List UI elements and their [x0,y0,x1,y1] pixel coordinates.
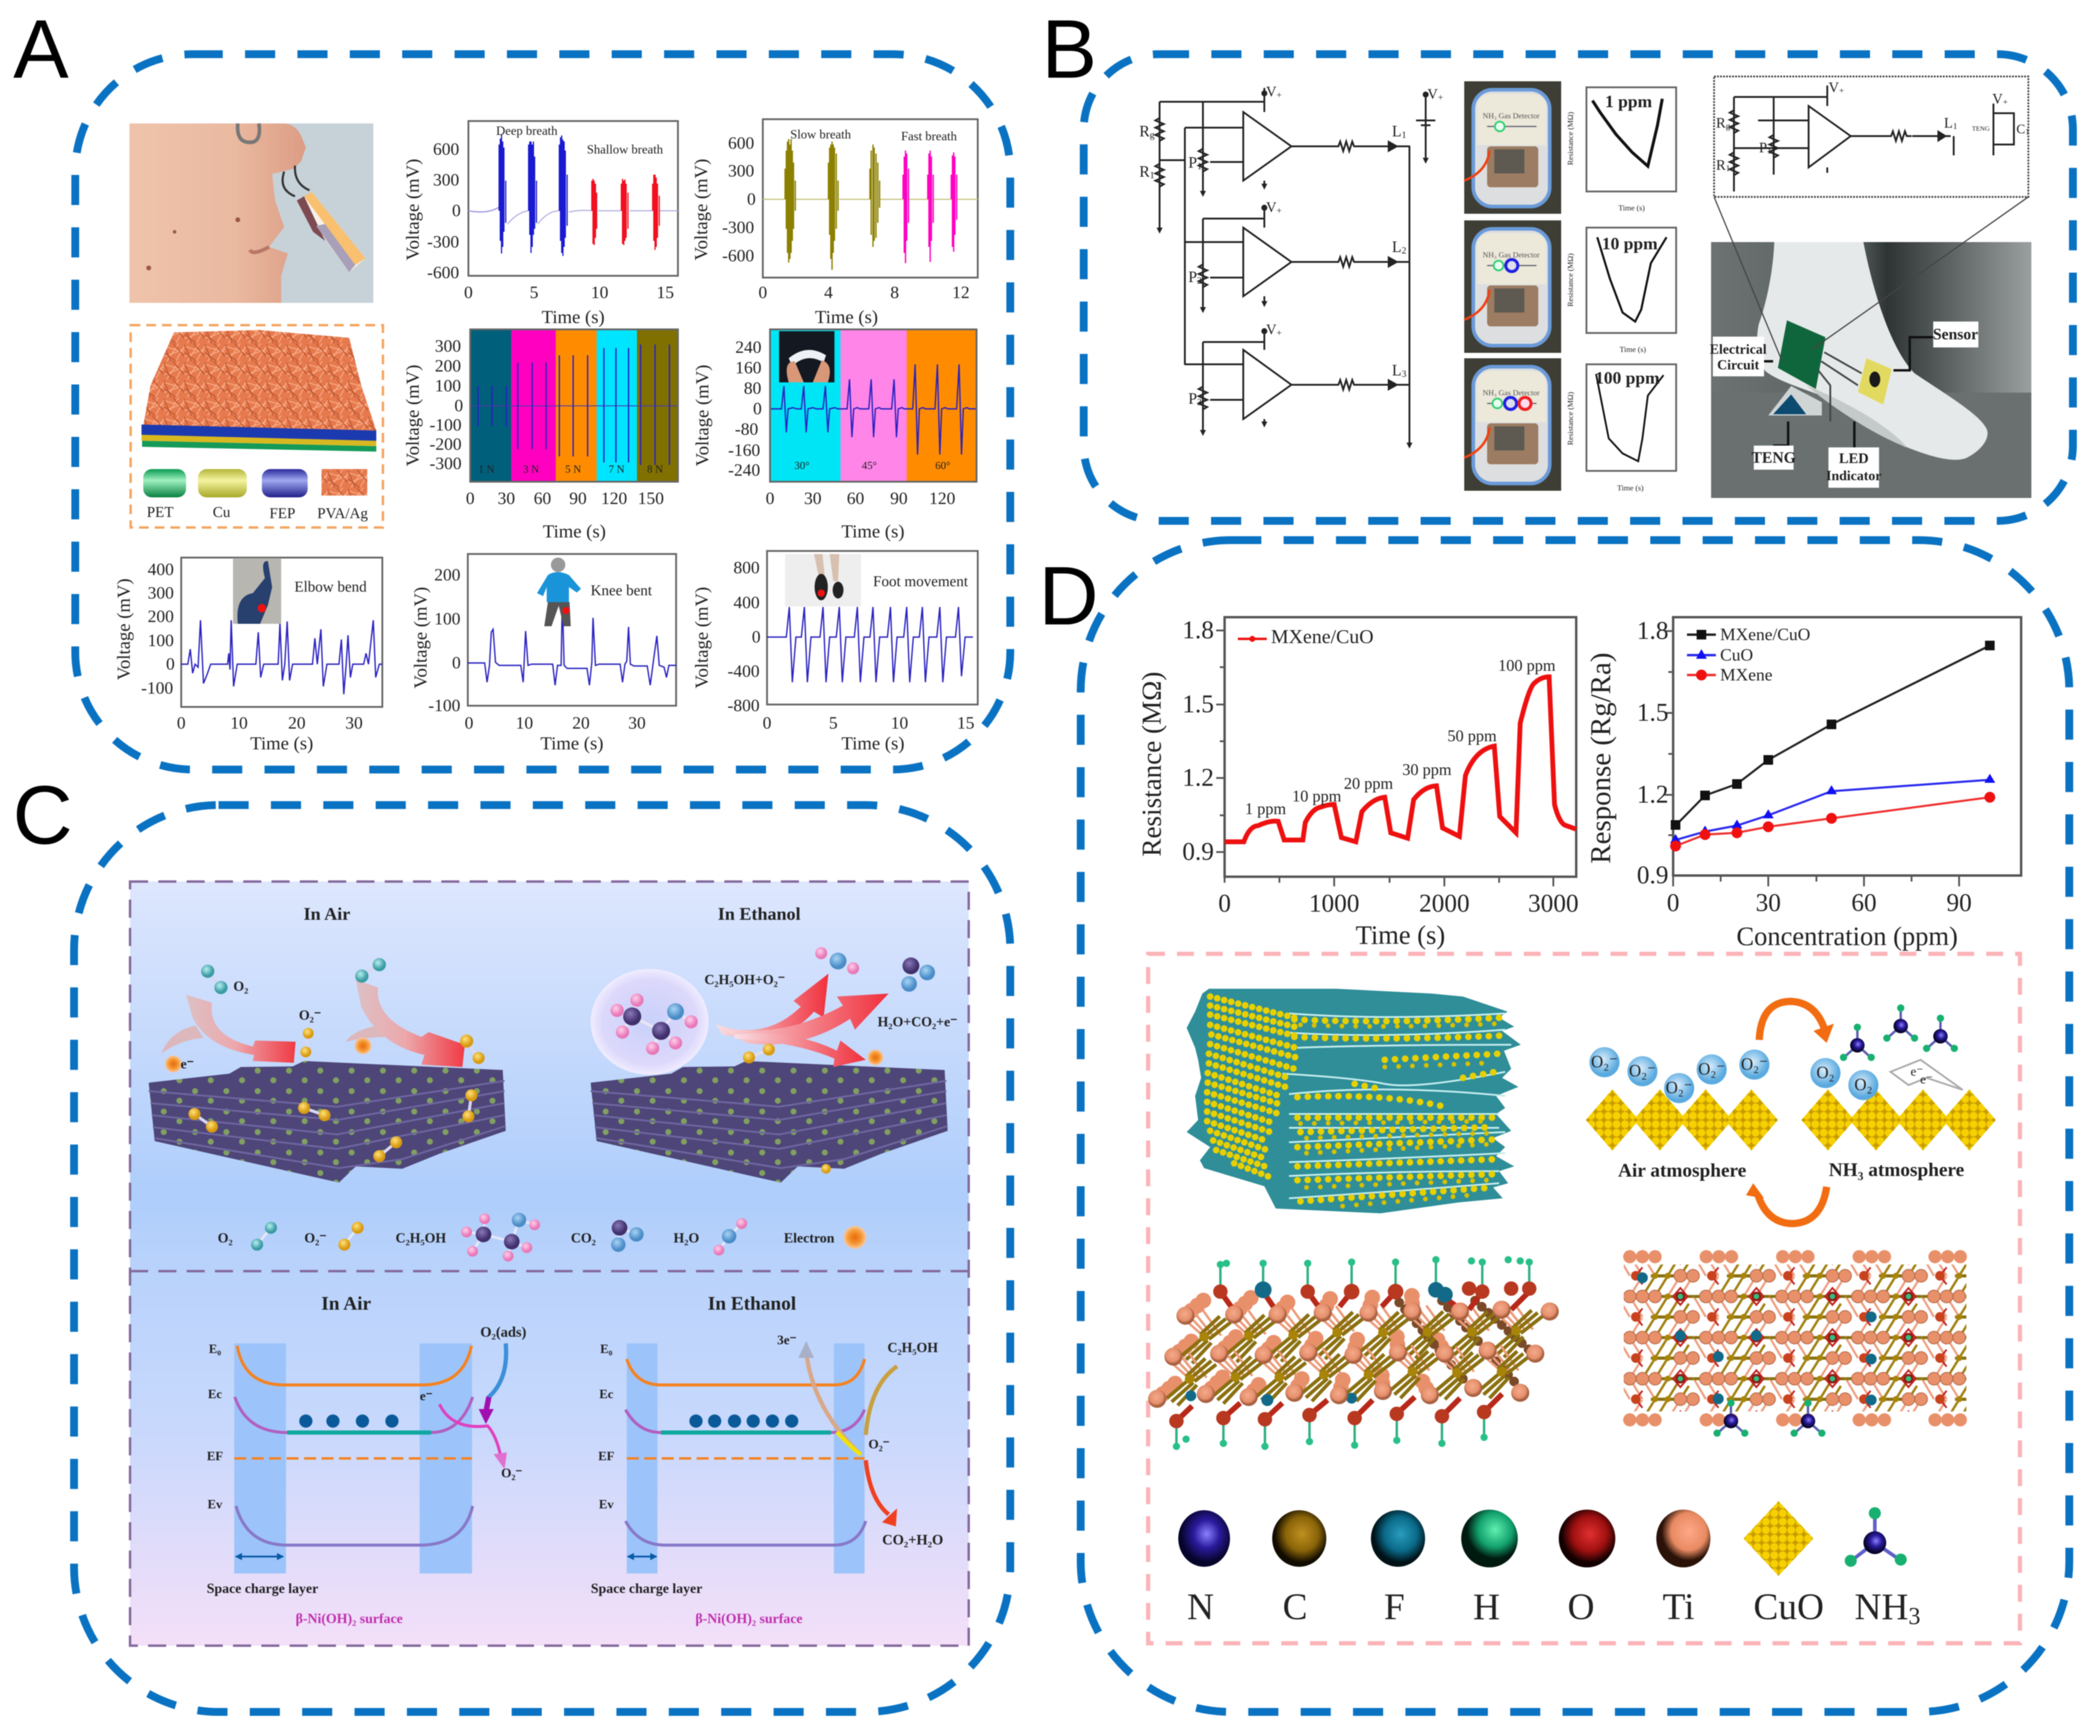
chart: slow and fast breath: 600 [728,134,754,153]
circuit schematic: 1 [1197,161,1202,171]
chart: elbow bend: 0 [177,714,185,733]
chart: deep and shallow breath: Time (s) [542,306,604,328]
circuit schematic: + [1276,328,1282,338]
chart: response vs concentration [1585,617,2021,951]
chart: deep and shallow breath [402,121,678,328]
chart: force response coloured bands: 1 N [479,463,494,475]
chart: resistance vs time: 2000 [1419,890,1470,918]
chart: elbow bend: Elbow bend [294,579,367,595]
small chart 10 ppm: Resistance (MΩ) [1565,254,1575,306]
chart: bending angle response: -160 [728,441,760,460]
chart: response vs concentration: 1.5 [1637,699,1668,727]
chart: deep and shallow breath: 15 [656,283,674,302]
molecule legend: O₂ [218,1231,232,1245]
chart: bending angle response: Voltage (mV) [691,364,713,467]
gas detector photo 100 ppm [1464,358,1561,491]
chart: foot movement [691,551,978,754]
chart: resistance vs time: 30 ppm [1402,761,1452,779]
panel letter D: D [1039,550,1099,642]
chart: resistance vs time: 0 [1219,890,1231,918]
chart: response vs concentration: Response (Rg/Ra) [1585,653,1617,863]
chart: resistance vs time: 10 ppm [1292,787,1341,805]
shoe scene with sensor and labels: LED [1839,451,1869,467]
element legend: O [1568,1587,1594,1628]
sensing mechanism: air atmosphere: O₂⁻ [1591,1053,1618,1072]
circuit schematic: + [1276,206,1282,216]
small chart 1 ppm: Time (s) [1618,204,1645,212]
chart: deep and shallow breath: -300 [427,232,459,252]
shoe scene with sensor and labels: Indicator [1826,468,1881,483]
chart: slow and fast breath: Voltage (mV) [690,158,712,261]
atomic structure: top view [1624,1257,1966,1437]
circuit inset: V [1828,80,1839,96]
chart: bending angle response [691,329,977,542]
circuit inset: g [1726,122,1730,131]
device structure dashed box [131,325,383,527]
chart: resistance vs time: 0.9 [1182,838,1214,866]
chart: force response coloured bands: Time (s) [543,520,606,542]
band diagram: in air: Ev [208,1497,223,1511]
chart: resistance vs time: MXene/CuO [1271,626,1373,648]
molecule legend: O₂⁻ [305,1231,326,1245]
chart: elbow bend: 100 [148,631,174,650]
chart: deep and shallow breath: 10 [591,283,608,302]
heading: In Air top: In Air [303,904,350,924]
chart: bending angle response: 0 [766,489,774,508]
small chart 1 ppm: Resistance (MΩ) [1565,112,1575,165]
chart: bending angle response: 30° [794,459,810,471]
chart: knee bent: Voltage (mV) [409,586,431,689]
panel letter A: A [13,3,69,96]
chart: resistance vs time: 1 ppm [1245,800,1286,818]
chart: resistance vs time: 1.8 [1182,617,1214,644]
chart: deep and shallow breath: Deep breath [496,123,558,138]
ethanol reaction arrows and molecules: H₂O+CO₂+e⁻ [878,1014,957,1030]
chart: elbow bend: Voltage (mV) [113,578,134,680]
chart: knee bent: -100 [428,696,461,715]
chart: knee bent: 100 [434,609,461,629]
circuit schematic: + [1276,90,1282,100]
chart: response vs concentration: MXene [1720,665,1772,685]
chart: force response coloured bands: 90 [570,489,586,508]
element legend: F [1384,1587,1405,1628]
small chart 1 ppm: 1 ppm [1605,92,1652,111]
circuit schematic: 2 [1402,246,1406,255]
chart: elbow bend: -100 [141,679,173,698]
chart: bending angle response: 240 [735,338,762,357]
chart: deep and shallow breath: 5 [530,283,538,302]
chart: slow and fast breath: 0 [747,190,756,209]
band diagram: in ethanol: E₀ [600,1342,612,1356]
band diagram: in ethanol: 3e⁻ [777,1332,797,1348]
chart: force response coloured bands: 120 [601,489,627,508]
band diagram: in ethanol: O₂⁻ [868,1437,890,1451]
sensing mechanism: air atmosphere [1586,1047,1778,1181]
air adsorption arrows and molecules: O₂⁻ [299,1008,321,1022]
band diagram: in air: e⁻ [420,1389,433,1403]
chart: response vs concentration: 30 [1756,889,1781,917]
chart: bending angle response: Time (s) [842,520,904,542]
chart: slow and fast breath: -600 [722,246,754,266]
chart: resistance vs time: 50 ppm [1447,727,1497,745]
device structure dashed box: PVA/Ag [317,506,368,521]
circuit schematic: 3 [1197,397,1202,407]
band diagram: in ethanol: β-Ni(OH)₂ surface [695,1611,803,1626]
chart: slow and fast breath: 4 [824,283,833,302]
chart: elbow bend: 10 [230,714,248,733]
element legend: C [1282,1587,1308,1628]
chart: elbow bend: 20 [288,714,306,733]
band diagram: in ethanol: Ec [599,1387,614,1401]
shoe scene with sensor and labels: Electrical [1710,342,1766,356]
chart: force response coloured bands: Voltage (mV) [402,364,423,467]
band diagram: in air [207,1325,526,1626]
circuit inset: L [1944,116,1953,131]
chart: slow and fast breath: Time (s) [815,306,878,328]
band diagram: in air: EF [207,1449,223,1463]
circuit inset: + [2002,98,2008,107]
molecule legend: CO₂ [571,1231,596,1245]
chart: deep and shallow breath: Voltage (mV) [402,158,423,261]
circuit schematic: 1 [1150,170,1155,181]
small chart 100 ppm [1565,364,1676,493]
shoe scene with sensor and labels: TENG [1751,449,1796,466]
circuit schematic: + [1438,93,1443,102]
element legend: H [1473,1587,1500,1628]
chart: bending angle response: 0 [753,399,762,418]
small chart 10 ppm: Time (s) [1620,344,1646,354]
chart: knee bent: 30 [629,714,645,733]
chart: resistance vs time: 1.2 [1182,764,1214,792]
chart: knee bent: 0 [465,714,473,733]
chart: resistance vs time: 100 ppm [1498,656,1556,674]
orange cycle arrows [1746,1001,1834,1224]
layered material: ethanol [591,1061,948,1183]
chart: resistance vs time: Resistance (MΩ) [1137,671,1167,857]
chart: force response coloured bands: 300 [435,337,461,356]
heading: In Ethanol lower: In Ethanol [708,1292,796,1314]
circuit schematic: R [1139,123,1150,140]
molecule legend: Electron [784,1231,834,1245]
circuit inset: + [1839,86,1844,96]
circuit inset: R [1716,158,1726,173]
circuit inset: 1 [1953,122,1957,131]
chart: force response coloured bands: 7 N [609,463,624,475]
small chart 100 ppm: 100 ppm [1595,369,1660,388]
chart: elbow bend: 300 [148,583,174,603]
chart: force response coloured bands: 30 [497,489,515,508]
chart: force response coloured bands: -300 [429,454,462,473]
circuit inset: P [1759,140,1767,156]
chart: foot movement: -400 [727,662,760,681]
chart: bending angle response: 45° [862,459,877,471]
panel C frame [74,805,1010,1712]
panel A frame [75,54,1010,770]
chart: bending angle response: 120 [929,489,955,508]
small chart 100 ppm: Time (s) [1617,483,1644,493]
chart: force response coloured bands: 0 [455,396,463,415]
circuit inset: 1 [1726,164,1730,173]
molecule legend [218,1213,866,1262]
chart: deep and shallow breath: -600 [427,263,459,282]
chart: resistance vs time [1137,617,1579,950]
chart: bending angle response: -80 [735,420,758,439]
chart: elbow bend [113,558,382,754]
sensing mechanism: air atmosphere: O₂⁻ [1741,1055,1768,1074]
circuit inset: V [1992,92,2002,107]
circuit inset: R [1716,116,1726,131]
chart: force response coloured bands: -200 [429,435,462,454]
band diagram: in air: Space charge layer [207,1581,318,1596]
band diagram: in air: E₀ [209,1342,221,1356]
chart: foot movement: 10 [891,714,908,733]
chart: foot movement: 400 [733,593,760,612]
chart: knee bent: Knee bent [591,583,652,599]
background dashed panel [130,882,969,1646]
chart: response vs concentration: CuO [1720,646,1753,665]
element legend [1178,1501,1921,1629]
shoe scene with sensor and labels: Sensor [1933,325,1978,343]
air adsorption arrows and molecules: O₂ [234,979,248,994]
chart: knee bent [409,554,676,754]
chart: knee bent: 0 [452,653,461,673]
circuit schematic: V [1266,322,1276,338]
chart: foot movement: -800 [727,696,760,715]
chart: response vs concentration: 0 [1667,889,1680,917]
chart: foot movement: Foot movement [873,573,968,590]
chart: response vs concentration: MXene/CuO [1720,625,1810,644]
sensing mechanism: NH3 atmosphere [1801,1004,1996,1180]
chart: foot movement: 0 [752,627,760,647]
circuit schematic [1139,84,1443,449]
chart: response vs concentration: 0.9 [1637,862,1668,889]
air adsorption arrows and molecules: e⁻ [181,1056,194,1072]
chart: response vs concentration: 90 [1946,889,1972,917]
chart: slow and fast breath: 12 [952,283,969,302]
gas detector photo 1 ppm [1464,81,1561,214]
small chart 10 ppm: 10 ppm [1602,234,1657,254]
chart: elbow bend: 200 [148,607,174,626]
chart: slow and fast breath: -300 [722,218,754,237]
chart: force response coloured bands: 150 [638,489,664,508]
chart: foot movement: Time (s) [842,732,904,754]
chart: response vs concentration: Concentration (ppm) [1736,921,1958,951]
chart: force response coloured bands: 200 [435,356,461,376]
zoom lines from circuit inset to shoe [1714,197,2028,361]
chart: foot movement: 5 [829,714,837,733]
chart: force response coloured bands: 5 N [565,463,581,475]
chart: elbow bend: 0 [166,655,175,674]
chart: response vs concentration: 1.8 [1637,617,1668,645]
chart: force response coloured bands: 8 N [647,463,663,475]
panel D frame [1081,540,2069,1712]
circuit schematic: V [1427,87,1438,102]
chart: deep and shallow breath: Shallow breath [587,142,663,157]
chart: knee bent: 200 [434,565,461,585]
chart: force response coloured bands [402,329,678,542]
layered material: air [149,1061,506,1183]
chart: slow and fast breath [690,119,978,328]
ethanol reaction arrows and molecules: C₂H₅OH+O₂⁻ [704,972,785,988]
band diagram: in air: Ec [208,1387,222,1401]
chart: bending angle response: 90 [890,489,908,508]
chart: bending angle response: 160 [735,358,762,378]
atomic structure: side view [1148,1256,1559,1450]
shoe scene with sensor and labels: Circuit [1717,358,1759,372]
panel A contents [113,119,978,754]
circuit schematic: 2 [1197,276,1202,285]
molecule legend: H₂O [674,1231,699,1245]
sensing mechanism: NH3 atmosphere: e⁻ [1910,1063,1924,1079]
band diagram: in ethanol [591,1332,943,1626]
device structure dashed box: PET [147,505,173,520]
chart: deep and shallow breath: 0 [464,283,473,302]
circuit schematic: 1 [1402,130,1406,140]
divider [130,1270,969,1272]
chart: resistance vs time: 3000 [1528,890,1579,918]
small chart 100 ppm: Resistance (MΩ) [1565,392,1575,445]
band diagram: in ethanol: EF [598,1449,614,1463]
chart: response vs concentration: 60 [1851,889,1877,917]
sensing mechanism: air atmosphere: O₂⁻ [1666,1079,1692,1097]
small chart 10 ppm [1565,228,1676,354]
chart: foot movement: 800 [733,558,760,577]
sensing mechanism: air atmosphere: Air atmosphere [1618,1159,1747,1181]
chart: force response coloured bands: 60 [533,489,551,508]
chart: slow and fast breath: 8 [890,283,899,302]
band diagram: in air: O₂(ads) [480,1325,526,1340]
band diagram: in air: β-Ni(OH)₂ surface [296,1611,403,1626]
sensing mechanism: air atmosphere: O₂⁻ [1698,1060,1725,1079]
MXene CuO layered stack [1187,989,1521,1213]
band diagram: in air: O₂⁻ [501,1466,523,1480]
chart: knee bent: Time (s) [541,732,603,754]
circuit schematic: V [1266,84,1276,100]
chart: deep and shallow breath: 0 [452,201,461,220]
panel B contents [1139,76,2031,498]
element legend: N [1187,1587,1214,1628]
heading: In Air lower: In Air [322,1292,371,1314]
chart: elbow bend: Time (s) [250,732,313,754]
chart: force response coloured bands: 0 [466,489,474,508]
circuit inset: C [2016,122,2025,136]
chart: knee bent: 20 [572,714,590,733]
band diagram: in ethanol: Space charge layer [591,1581,703,1596]
circuit schematic: P [1188,154,1197,171]
circuit inset: 1 [1767,146,1771,156]
sensing mechanism: NH3 atmosphere: O₂ [1854,1075,1872,1095]
circuit schematic: P [1188,269,1197,285]
photo: nose sensor [129,123,373,303]
chart: resistance vs time: 20 ppm [1344,774,1393,792]
circuit schematic: L [1392,361,1402,379]
circuit inset: TENG [1972,125,1990,132]
band diagram: in ethanol: Ev [599,1497,614,1511]
small chart 1 ppm [1565,87,1676,212]
chart: knee bent: 10 [515,714,533,733]
panel D contents [1137,617,2021,1643]
circuit schematic: P [1188,390,1197,407]
sensing mechanism: NH3 atmosphere: O₂ [1816,1063,1834,1083]
chart: force response coloured bands: 3 N [523,463,539,475]
chart: bending angle response: 30 [804,489,821,508]
circuit inset: 1 [2025,128,2030,136]
element legend: CuO [1753,1587,1824,1628]
chart: foot movement: 15 [957,714,974,733]
circuit inset [1714,76,2030,197]
chart: slow and fast breath: Slow breath [791,127,851,142]
chart: foot movement: Voltage (mV) [691,586,712,689]
gas detector photo 10 ppm [1464,220,1561,353]
chart: bending angle response: 60 [847,489,865,508]
chart: deep and shallow breath: 300 [433,170,459,190]
chart: foot movement: 0 [763,714,771,733]
device structure dashed box: Cu [213,505,231,520]
chart: bending angle response: -240 [728,461,760,480]
chart: slow and fast breath: 0 [759,283,767,302]
chart: bending angle response: 80 [744,379,761,398]
chart: force response coloured bands: -100 [429,415,462,435]
heading: In Ethanol top: In Ethanol [718,904,801,924]
device structure dashed box: FEP [269,506,296,521]
air adsorption arrows and molecules [161,958,485,1162]
chart: force response coloured bands: 100 [435,376,461,396]
circuit schematic: L [1392,238,1402,255]
shoe scene with sensor and labels [1710,242,2031,498]
molecule legend: C₂H₅OH [396,1231,446,1245]
circuit schematic: V [1266,200,1276,216]
chart: resistance vs time: 1.5 [1182,691,1214,718]
ethanol reaction arrows and molecules [591,947,957,1174]
band diagram: in ethanol: C₂H₅OH [887,1340,938,1355]
panel letter B: B [1042,3,1097,96]
panel letter C: C [13,769,73,862]
chart: resistance vs time: 1000 [1309,890,1359,918]
circuit schematic: R [1139,163,1150,181]
chart: elbow bend: 30 [346,714,362,733]
element legend: Ti [1663,1587,1694,1628]
sensing mechanism: NH3 atmosphere: NH₃ atmosphere [1829,1159,1964,1180]
chart: resistance vs time: Time (s) [1356,920,1445,950]
panel B frame [1084,54,2073,521]
circuit schematic: 3 [1402,369,1406,379]
chart: elbow bend: 400 [148,560,174,579]
element legend: NH [1854,1587,1909,1628]
sensing mechanism: air atmosphere: O₂⁻ [1629,1062,1656,1080]
chart: slow and fast breath: Fast breath [901,129,957,143]
chart: bending angle response: 60° [935,459,951,471]
band diagram: in ethanol: CO₂+H₂O [882,1532,943,1548]
dashed mechanism box [1148,954,2020,1643]
chart: deep and shallow breath: 600 [433,140,459,159]
chart: response vs concentration: 1.2 [1637,781,1668,809]
sensing mechanism: NH3 atmosphere: e⁻ [1920,1072,1933,1086]
circuit schematic: g [1150,130,1155,140]
chart: slow and fast breath: 300 [728,161,754,181]
panel C mechanism diagram [130,882,969,1646]
element legend: 3 [1909,1602,1921,1629]
circuit schematic: L [1392,123,1402,140]
